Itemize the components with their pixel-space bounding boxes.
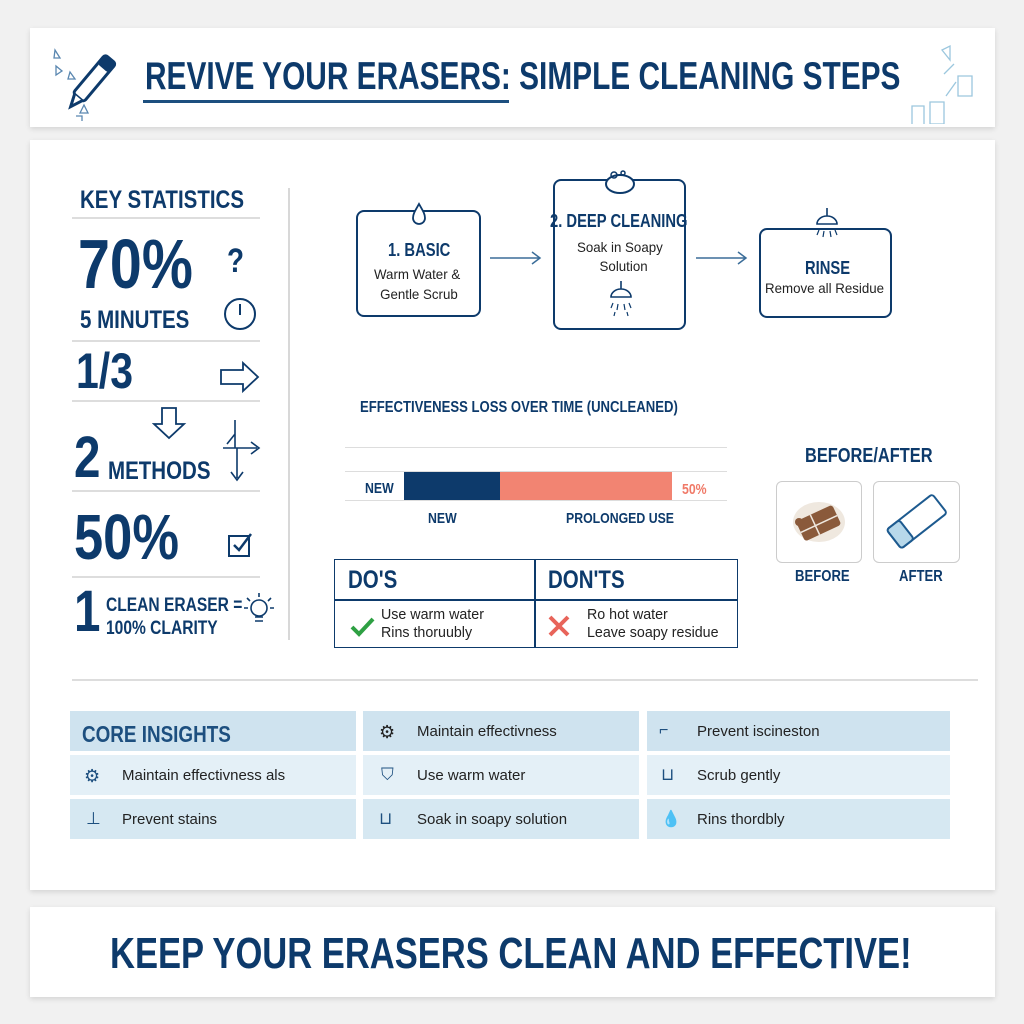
panel: core insights: CORE INSIGHTS xyxy=(82,721,231,747)
panel: core insights: ⊔ xyxy=(661,765,674,784)
panel: core insights: ⛉ xyxy=(381,765,394,784)
arrow 2 xyxy=(696,251,748,265)
step 1 box: 1. BASIC xyxy=(388,240,450,260)
table: dos and donts: Use warm water xyxy=(381,606,484,623)
main card xyxy=(30,140,995,890)
stat 70%: 70% xyxy=(78,225,193,303)
title: REVIVE YOUR ERASERS: SIMPLE CLEANING STEPS xyxy=(145,55,900,98)
panel: core insights: ⌐ xyxy=(659,722,668,739)
table: dos and donts: DO'S xyxy=(348,566,397,594)
stat 2 methods: 2 xyxy=(74,425,100,490)
step 2 box: Soak in Soapy xyxy=(577,239,663,255)
step 3 box: RINSE xyxy=(805,258,850,278)
step 1 box: Warm Water & xyxy=(374,266,460,282)
icon: marker xyxy=(53,48,116,121)
table: dos and donts: Ro hot water xyxy=(587,606,668,623)
panel: core insights: Soak in soapy solution xyxy=(417,811,567,828)
panel: core insights: Scrub gently xyxy=(697,767,780,784)
step 2 box xyxy=(553,179,686,330)
table: dos and donts xyxy=(334,559,738,648)
step 2 box: 2. DEEP CLEANING xyxy=(550,211,688,231)
table: dos and donts: Rins thoruubly xyxy=(381,624,472,641)
heading: KEY STATISTICS xyxy=(80,186,244,214)
chart: effectiveness loss: PROLONGED USE xyxy=(566,510,674,527)
header card xyxy=(30,28,995,127)
step 2 box: Solution xyxy=(600,258,648,274)
panel: before/after: BEFORE/AFTER xyxy=(805,445,933,467)
panel: key statistics: CLEAN ERASER = xyxy=(106,595,242,616)
chart: effectiveness loss: NEW xyxy=(365,480,394,497)
panel: core insights: Use warm water xyxy=(417,767,525,784)
panel: before/after: AFTER xyxy=(899,568,943,585)
panel: key statistics: 100% CLARITY xyxy=(106,618,218,639)
panel: core insights: 💧 xyxy=(661,811,681,828)
panel: core insights: Prevent iscineston xyxy=(697,723,820,740)
panel: core insights: Maintain effectivness als xyxy=(122,767,285,784)
chart: effectiveness loss: 50% xyxy=(682,481,707,498)
footer card xyxy=(30,907,995,997)
panel: core insights: ⊔ xyxy=(379,809,392,828)
stat 5 minutes: 5 MINUTES xyxy=(80,306,189,334)
step 3 box: Remove all Residue xyxy=(765,280,884,296)
panel: key statistics: METHODS xyxy=(108,457,210,485)
panel: core insights: Prevent stains xyxy=(122,811,217,828)
panel: before/after xyxy=(776,445,960,585)
footer slogan: KEEP YOUR ERASERS CLEAN AND EFFECTIVE! xyxy=(110,929,912,978)
step 1 box: Gentle Scrub xyxy=(380,286,458,302)
step 1 box xyxy=(356,210,481,317)
panel: core insights: ⚙ xyxy=(84,766,100,786)
panel: core insights: Rins thordbly xyxy=(697,811,785,828)
panel: core insights: ⚙ xyxy=(379,722,395,742)
icon: squares decoration xyxy=(911,45,973,124)
arrow 1 xyxy=(490,251,542,265)
chart: effectiveness loss xyxy=(345,399,727,527)
table: dos and donts: Leave soapy residue xyxy=(587,624,719,641)
stat 1 clean eraser: 1 xyxy=(74,579,100,644)
panel: key statistics xyxy=(72,186,274,644)
table: dos and donts: DON'TS xyxy=(548,566,625,594)
stat 1/3: 1/3 xyxy=(76,343,133,399)
panel: before/after: BEFORE xyxy=(795,568,850,585)
panel: core insights: ⊥ xyxy=(86,809,101,828)
panel: core insights xyxy=(70,711,950,839)
chart: effectiveness loss: EFFECTIVENESS LOSS OVER TIME (UNCLEANED) xyxy=(360,399,678,416)
step 3 box xyxy=(759,228,892,318)
panel: key statistics: ? xyxy=(227,242,244,280)
stat 50%: 50% xyxy=(74,501,179,573)
chart: effectiveness loss: NEW xyxy=(428,510,457,527)
panel: core insights: Maintain effectivness xyxy=(417,723,557,740)
